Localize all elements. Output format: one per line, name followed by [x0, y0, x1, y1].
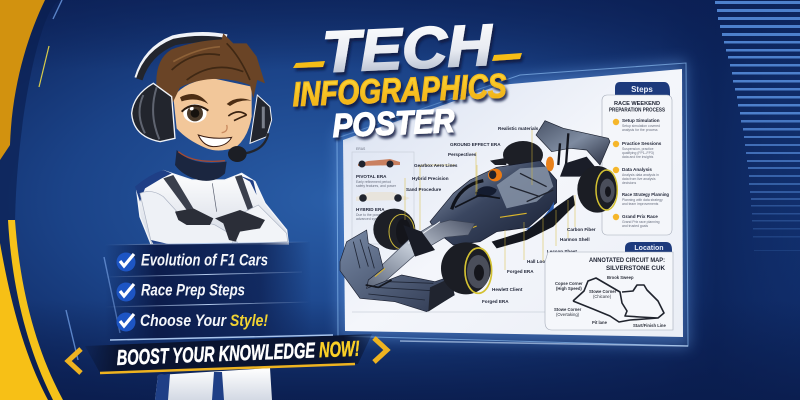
check item: Race Prep Steps: Race Prep Steps — [141, 282, 245, 300]
check item: Race Prep Steps — [116, 282, 245, 302]
circuit labels: Pit lane — [592, 320, 608, 325]
step 4 — [622, 192, 669, 206]
car far front wheel — [373, 209, 415, 250]
face — [173, 78, 252, 150]
poster panel — [336, 60, 690, 348]
car gold accent — [452, 213, 527, 236]
step 5: Grand Prix race planning — [622, 220, 660, 224]
eyebrows — [180, 94, 208, 104]
car annotation labels: Gearbox Aero Lines — [414, 163, 458, 168]
small car thumbnails: evolution of F1 cars: advanced systems — [356, 217, 384, 221]
circuit labels: (Chicane) — [593, 294, 612, 299]
F1 car cutaway illustration — [340, 121, 617, 312]
car annotation labels: Hybrid Precision — [412, 176, 449, 181]
check item: Evolution of F1 Cars: Evolution of F1 Cars — [141, 252, 268, 270]
location tab: Location — [634, 245, 664, 252]
circuit labels: (High Speed) — [556, 286, 582, 291]
step 1: Setup Simulation — [622, 118, 660, 123]
circuit labels: (Overtaking) — [556, 312, 580, 317]
location panel — [545, 242, 673, 330]
car annotation labels: Forged ERA — [507, 269, 534, 274]
checklist rows background — [105, 242, 312, 340]
car nose and front wing — [340, 220, 475, 312]
step 2: qualifying (FP1–FP3) — [622, 151, 654, 155]
circuit map title: ANNOTATED CIRCUIT MAP: — [589, 257, 665, 264]
step 1: analysis for the process — [622, 128, 658, 132]
small car thumbnails: evolution of F1 cars: safety features, and power — [356, 184, 397, 188]
steps heading: RACE WEEKEND — [614, 101, 660, 107]
circuit labels: Copse Corner — [555, 281, 583, 286]
step 3: Data Analysis — [622, 167, 652, 172]
step 5: Grand Prix Race — [622, 214, 658, 219]
step 2: Practice Sessions — [622, 141, 662, 146]
circuit map title: SILVERSTONE CUK — [606, 265, 665, 272]
check item: Choose Your Style: Choose Your Style! — [140, 312, 268, 330]
check item: Evolution of F1 Cars — [116, 252, 268, 272]
step 2 — [613, 141, 662, 159]
small car thumbnails: evolution of F1 cars — [352, 147, 414, 244]
thumbnail: early car — [358, 159, 400, 168]
car far rear wheel — [503, 141, 543, 169]
small car thumbnails: evolution of F1 cars: Early refinement period — [356, 180, 391, 184]
call to action banner — [68, 334, 387, 373]
steps tab — [615, 82, 670, 96]
open eye — [182, 104, 208, 123]
title dash left — [293, 61, 325, 68]
car annotation labels: Hewlett Client — [492, 287, 523, 292]
circuit labels: Stowe Corner — [554, 307, 582, 312]
step 3: Analysis data analysis in — [622, 173, 659, 177]
banner text: BOOST YOUR KNOWLEDGE NOW! — [116, 337, 360, 370]
smile — [198, 135, 232, 147]
circuit labels: Stowe Corner — [589, 289, 617, 294]
step 1 — [613, 118, 660, 132]
title: POSTER: POSTER — [332, 102, 455, 144]
step 2: Suspension, practice — [622, 147, 654, 151]
driver character — [132, 33, 288, 400]
nose — [222, 125, 227, 133]
hair — [156, 33, 265, 105]
step 1: Setup simulation covered — [622, 124, 660, 128]
silverstone circuit track — [573, 278, 664, 322]
car near rear wheel — [577, 166, 617, 213]
thumbnail: hybrid car — [356, 192, 410, 202]
car annotation labels: Perspectives — [448, 152, 477, 157]
car front wing surfaces — [340, 230, 454, 312]
small car thumbnails: evolution of F1 cars: PIVOTAL ERA — [356, 174, 387, 179]
steps panel — [602, 82, 672, 235]
step 2: data and tire insights — [622, 155, 654, 159]
small car thumbnails: evolution of F1 cars: ERAS — [356, 147, 366, 151]
step 3 — [613, 167, 659, 185]
title: TECH: TECH — [321, 13, 495, 85]
circuit labels: Brook Sweep — [607, 275, 634, 280]
car near front wheel — [441, 242, 492, 294]
car annotation labels: Realistic materials — [498, 126, 539, 131]
step 5: and trusted goals — [622, 224, 648, 228]
car cockpit and halo — [475, 186, 497, 197]
car blue sidepod — [525, 202, 554, 230]
car annotation labels: GROUND EFFECT ERA — [450, 142, 501, 147]
car nose — [365, 220, 475, 288]
left ear cup — [132, 83, 175, 142]
car annotation labels — [405, 126, 596, 304]
right ear cup — [250, 95, 272, 143]
car orange intake — [488, 157, 554, 181]
car annotation labels: Lesson Sheet — [547, 249, 577, 254]
car annotation labels: Carbon Fiber — [567, 227, 596, 232]
steps heading: PREPARATION PROCESS — [609, 108, 665, 114]
winking eye — [228, 112, 247, 121]
title dash right — [492, 53, 522, 61]
step 4: Planning with data strategy — [622, 198, 663, 202]
driver head — [132, 33, 272, 162]
driver collar — [175, 150, 227, 181]
car rear wing — [536, 121, 610, 177]
circuit map title — [589, 257, 665, 272]
step 3: decisions — [622, 181, 636, 185]
circuit labels: Start/Finish Line — [633, 323, 666, 328]
small car thumbnails: evolution of F1 cars: HYBRID ERA — [356, 207, 385, 212]
car engine cover glass — [497, 167, 553, 208]
car annotation labels: Forged ERA — [482, 299, 509, 304]
step 4: Race Strategy Planning — [622, 192, 669, 197]
driver gloves — [175, 208, 213, 225]
left gold swoosh — [0, 0, 63, 400]
right side stripes — [715, 1, 800, 251]
car dark floor — [492, 195, 575, 248]
steps heading — [609, 101, 665, 114]
car middle body — [430, 161, 575, 248]
headset band — [138, 36, 227, 78]
step 5 — [613, 214, 660, 228]
driver legs — [155, 368, 272, 400]
steps tab: Steps — [631, 85, 653, 94]
step 3: data from live analysis — [622, 177, 656, 181]
car annotation labels: Harmon Shell — [560, 237, 590, 242]
chevron left — [68, 349, 81, 373]
circuit labels — [554, 275, 666, 328]
car annotation labels: Sand Procedure — [406, 187, 442, 192]
chevron right — [374, 338, 387, 362]
step 4: and team improvements — [622, 202, 659, 206]
small car thumbnails: evolution of F1 cars: Due to the power unit — [356, 213, 388, 217]
feature checklist — [105, 242, 312, 340]
car annotation labels: Hall Loom — [527, 259, 549, 264]
microphone — [228, 133, 268, 162]
title — [292, 13, 522, 144]
driver torso and arms — [135, 150, 288, 244]
title: INFOGRAPHICS: INFOGRAPHICS — [292, 67, 507, 114]
